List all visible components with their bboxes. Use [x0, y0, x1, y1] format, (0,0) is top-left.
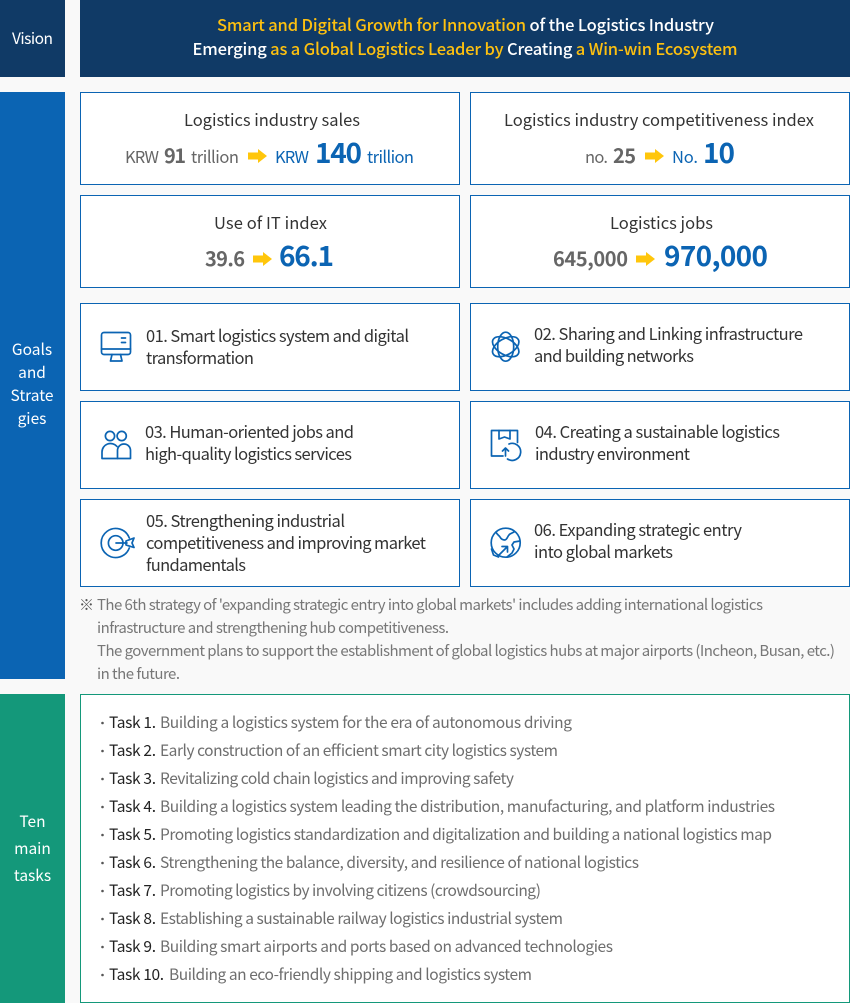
panel: strategy 04	[470, 402, 850, 488]
panel: vision label	[0, 0, 65, 77]
panel: strategy 06: into global markets	[534, 539, 673, 563]
panel: logistics industry sales: 140	[315, 132, 362, 172]
panel: logistics jobs: 970,000	[664, 235, 768, 275]
panel: task list: Building a logistics system leading the distribution, manufacturing, and platform industries	[160, 795, 775, 817]
panel: goals and strategies label: Strate	[11, 384, 53, 406]
icon: globe	[491, 528, 520, 557]
panel: competitiveness index: 10	[703, 132, 735, 172]
text block: footnote: The 6th strategy of 'expanding strategic entry into global markets' includes adding international logistics	[97, 594, 763, 615]
panel: strategy 04: industry environment	[535, 441, 690, 465]
panel: logistics industry sales: KRW	[125, 144, 160, 168]
panel: use of IT index: Use of IT index	[214, 210, 327, 234]
arrow: jobs	[636, 252, 655, 266]
panel: task list: Early construction of an efficient smart city logistics system	[160, 739, 558, 761]
panel: use of IT index: 39.6	[205, 243, 245, 272]
panel: vision label: Vision	[12, 27, 53, 49]
panel: task list: Task 10.	[109, 963, 164, 985]
panel: goals and strategies label: Goals	[12, 338, 52, 360]
panel: goals and strategies label	[0, 92, 65, 679]
icon: target	[101, 528, 134, 557]
panel: logistics jobs	[470, 196, 850, 288]
panel: competitiveness index: Logistics industry competitiveness index	[504, 107, 814, 131]
arrow: sales	[248, 149, 267, 163]
panel: logistics jobs: 645,000	[553, 243, 628, 272]
panel: goals and strategies label: and	[18, 361, 46, 383]
panel: task list: Building smart airports and ports based on advanced technologies	[160, 935, 613, 957]
panel: logistics industry sales	[80, 92, 460, 184]
panel: logistics industry sales: Logistics industry sales	[184, 107, 360, 131]
panel: strategy 03: high-quality logistics services	[145, 441, 352, 465]
panel: goals and strategies label: gies	[18, 407, 46, 429]
panel: use of IT index: 66.1	[279, 235, 334, 275]
panel: task list: Task 7.	[109, 879, 156, 901]
panel: task list: Task 4.	[109, 795, 156, 817]
arrow: competitiveness	[645, 149, 664, 163]
panel: use of IT index	[80, 196, 460, 288]
panel: logistics industry sales: trillion	[191, 144, 239, 168]
panel: task list: Establishing a sustainable railway logistics industrial system	[160, 907, 563, 929]
panel: task list	[80, 694, 850, 1002]
text block: footnote: infrastructure and strengthening hub competitiveness.	[97, 617, 449, 638]
icon: monitor	[102, 332, 130, 361]
panel: strategy 03: 03. Human-oriented jobs and	[145, 419, 354, 443]
panel: strategy 06	[470, 500, 850, 586]
panel: strategy 06: 06. Expanding strategic entry	[534, 517, 742, 541]
panel: task list: Task 9.	[109, 935, 156, 957]
panel: strategy 05: 05. Strengthening industrial	[146, 508, 345, 532]
panel: competitiveness index: no.	[585, 144, 608, 168]
panel: ten main tasks label: Ten	[19, 810, 46, 832]
panel: strategy 02: 02. Sharing and Linking infrastructure	[534, 321, 803, 345]
icon: box with recycle arrow	[492, 430, 521, 460]
panel: competitiveness index	[470, 92, 850, 184]
panel: task list: Task 3.	[109, 767, 156, 789]
panel: task list: Building a logistics system for the era of autonomous driving	[160, 711, 572, 733]
panel: task list: Promoting logistics standardization and digitalization and building a national logistics map	[160, 823, 772, 845]
panel: strategy 01: transformation	[146, 345, 254, 369]
panel: ten main tasks label: tasks	[14, 864, 51, 886]
panel: vision statement	[80, 0, 850, 77]
panel: task list: Task 6.	[109, 851, 156, 873]
panel: strategy 05	[80, 500, 460, 586]
panel: task list: Revitalizing cold chain logistics and improving safety	[160, 767, 514, 789]
panel: task list: Building an eco-friendly shipping and logistics system	[169, 963, 532, 985]
panel: logistics industry sales: trillion	[367, 144, 414, 168]
panel: task list: Task 1.	[109, 711, 156, 733]
panel: strategy 05: competitiveness and improving market	[146, 530, 426, 554]
text block: footnote: ※	[79, 594, 94, 615]
panel: task list: Task 5.	[109, 823, 156, 845]
text block: footnote: in the future.	[97, 663, 180, 684]
panel: task list: Task 2.	[109, 739, 156, 761]
panel: task list: Strengthening the balance, diversity, and resilience of national logistics	[160, 851, 639, 873]
panel: strategy 01	[80, 304, 460, 390]
panel: competitiveness index: 25	[613, 140, 636, 169]
arrow: IT index	[253, 252, 272, 266]
panel: task list: Task 8.	[109, 907, 156, 929]
panel: strategy 01: 01. Smart logistics system and digital	[146, 323, 409, 347]
panel: ten main tasks label: main	[14, 837, 51, 859]
panel: logistics industry sales: 91	[164, 140, 186, 169]
panel: logistics jobs: Logistics jobs	[610, 210, 713, 234]
panel: task list: Promoting logistics by involving citizens (crowdsourcing)	[160, 879, 541, 901]
panel: strategy 02: and building networks	[534, 343, 694, 367]
panel: strategy 05: fundamentals	[146, 552, 246, 576]
panel: competitiveness index: No.	[672, 144, 698, 168]
text block: footnote	[79, 594, 835, 684]
panel: strategy 03	[80, 402, 460, 488]
icon: two people	[102, 431, 130, 458]
panel: logistics industry sales: KRW	[275, 144, 310, 168]
panel: strategy 02	[470, 304, 850, 390]
panel: ten main tasks label	[0, 694, 65, 1003]
text block: footnote: The government plans to support the establishment of global logistics hubs at major airports (Incheon, Busan, etc.)	[97, 640, 835, 661]
panel: vision statement: Emerging as a Global Logistics Leader by Creating a Win-win Ecosystem	[192, 36, 738, 60]
panel: vision statement: Smart and Digital Growth for Innovation of the Logistics Industry	[217, 12, 714, 36]
panel: strategy 04: 04. Creating a sustainable logistics	[535, 419, 780, 443]
icon: linked network	[489, 332, 522, 361]
